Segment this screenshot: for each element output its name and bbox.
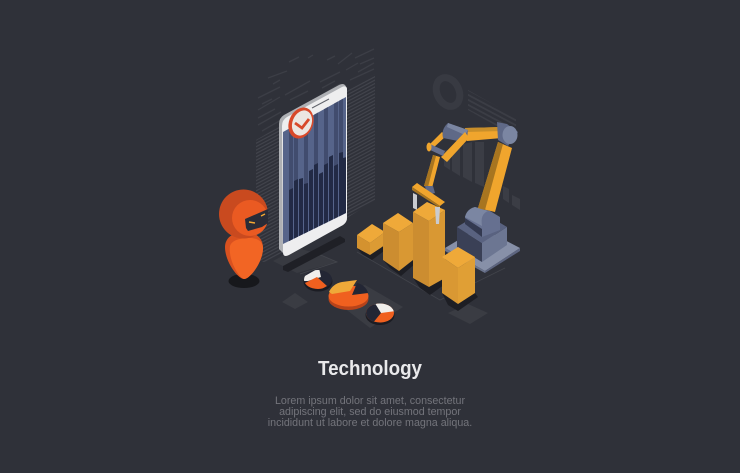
arm shoulder	[465, 207, 500, 237]
ghost donut	[432, 74, 464, 110]
pie chart 2	[328, 280, 368, 310]
check badge	[284, 104, 318, 142]
ghost bars	[444, 142, 520, 210]
description text: Lorem ipsum dolor sit amet, consectetur	[275, 395, 465, 407]
robot visor	[245, 209, 268, 231]
scattered code dashes	[320, 49, 374, 96]
arm horizontal segment	[465, 127, 503, 141]
description text: incididunt ut labore et dolore magna aliqua.	[268, 417, 472, 429]
phone screen bars	[289, 152, 347, 247]
arm base plate	[445, 227, 520, 271]
ghost infographic behind robot arm	[432, 74, 520, 210]
block 4	[442, 247, 475, 304]
scattered code dashes	[258, 55, 313, 131]
arm forearm fork	[427, 132, 446, 150]
floor panels	[273, 248, 505, 328]
block 1	[357, 224, 385, 255]
block 3	[413, 202, 445, 287]
phone body	[279, 84, 347, 255]
description text: adipiscing elit, sed do eiusmod tempor	[279, 406, 461, 418]
ghost text	[468, 90, 516, 137]
robot arm	[412, 122, 520, 273]
code lines: right of phone	[320, 49, 375, 218]
robot head	[219, 190, 268, 238]
robot shadow	[228, 274, 260, 288]
block shadows	[357, 245, 478, 311]
gripper	[412, 183, 445, 210]
bar chart of blocks	[357, 202, 478, 311]
title: Technology	[318, 358, 423, 380]
arm pedestal	[457, 227, 482, 262]
pie chart 1	[304, 270, 332, 292]
block 2	[383, 213, 413, 271]
gripper front finger	[435, 207, 440, 224]
arm lower segment	[424, 155, 440, 188]
arm wrist cylinder	[443, 123, 468, 142]
pie chart 3	[366, 304, 394, 325]
orange robot character	[219, 190, 268, 288]
robot body	[225, 232, 263, 279]
phone	[279, 84, 347, 256]
arm elbow joint	[497, 122, 518, 146]
arm wrist pin	[428, 144, 445, 156]
phone screen	[282, 96, 347, 251]
code lines: left of phone	[256, 55, 313, 262]
arm upper segment	[478, 142, 512, 212]
phone shadow	[283, 236, 345, 272]
description text	[268, 395, 472, 429]
phone speaker	[312, 99, 329, 108]
